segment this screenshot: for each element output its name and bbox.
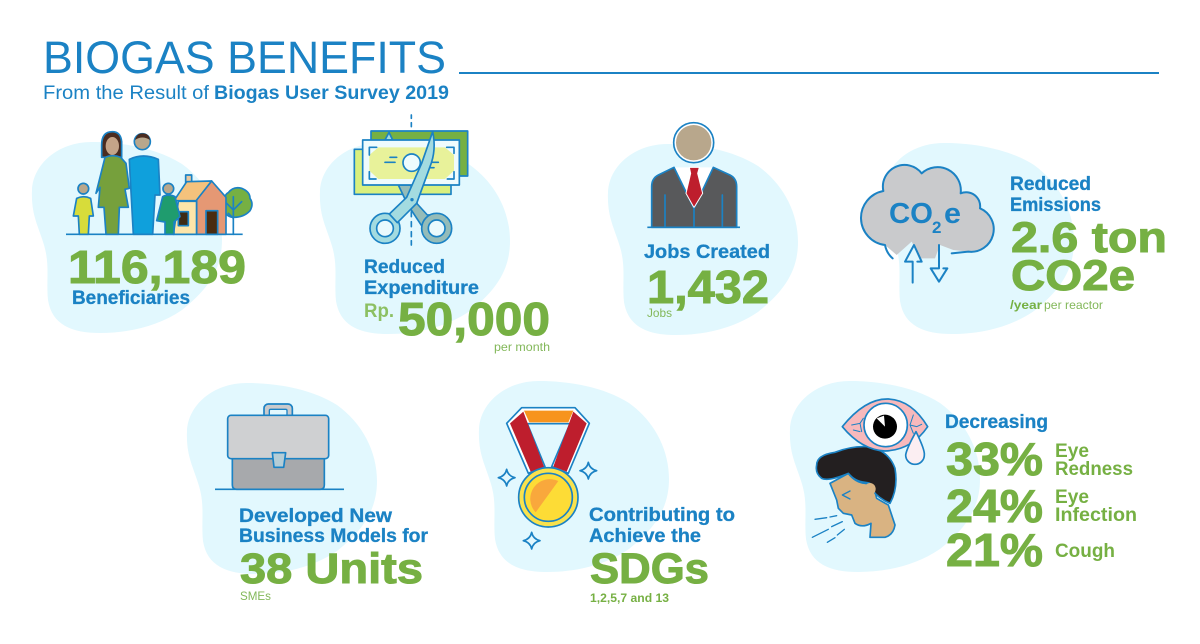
number: SDGs: SDGs bbox=[590, 545, 709, 593]
panel: business models bbox=[187, 383, 429, 603]
heading: developed new business models: Business Models for bbox=[239, 526, 429, 547]
note: per year per reactor: per reactor bbox=[1044, 298, 1103, 312]
stat: 33% eye redness: Redness bbox=[1055, 459, 1133, 480]
stat: 33% eye redness: 33% bbox=[946, 433, 1043, 485]
number: 2.6 ton CO2e: CO2e bbox=[1011, 252, 1135, 300]
panel: reduced emissions bbox=[861, 143, 1167, 334]
icon: CO2e cloud with arrows: CO bbox=[889, 198, 933, 230]
background blob: emissions bbox=[884, 143, 1074, 334]
number: 2.6 ton CO2e: 2.6 ton bbox=[1011, 214, 1167, 262]
note: per year per reactor: /year bbox=[1010, 298, 1042, 312]
title: BIOGAS BENEFITS bbox=[43, 32, 446, 83]
icon: medal bbox=[498, 408, 597, 549]
number: 116,189: 116,189 bbox=[68, 241, 246, 293]
note: per year per reactor bbox=[1010, 298, 1103, 312]
heading: reduced expenditure: Expenditure bbox=[364, 278, 479, 299]
icon: red eye and coughing person bbox=[812, 399, 928, 542]
background blob: SDGs bbox=[479, 381, 669, 572]
background blob: expenditure bbox=[320, 143, 510, 334]
panel: jobs created bbox=[608, 123, 798, 335]
icon: CO2e cloud with arrows: e bbox=[944, 198, 961, 230]
stat: 21% cough: 21% bbox=[946, 524, 1043, 576]
panel: SDGs bbox=[479, 381, 735, 605]
stat: 21% cough bbox=[946, 524, 1115, 576]
note: per month: per month bbox=[494, 340, 550, 354]
heading: reduced emissions: Emissions bbox=[1010, 195, 1101, 216]
heading: reduced expenditure: Reduced bbox=[364, 257, 445, 278]
panel: beneficiaries bbox=[32, 132, 252, 333]
note: jobs: Jobs bbox=[647, 306, 672, 320]
stat: 24% eye infection: Infection bbox=[1055, 505, 1137, 526]
icon: person in suit bbox=[647, 123, 740, 227]
subtitle: From the Result of bbox=[43, 83, 210, 104]
stat: 24% eye infection bbox=[946, 480, 1137, 532]
heading: developed new business models bbox=[239, 506, 429, 547]
label: beneficiaries: Beneficiaries bbox=[72, 288, 190, 309]
heading: developed new business models: Developed New bbox=[239, 506, 392, 527]
stat: 33% eye redness bbox=[946, 433, 1133, 485]
background blob: beneficiaries bbox=[32, 142, 222, 333]
heading: contributing to achieve the: Contributing to bbox=[589, 505, 735, 526]
note: goals list: 1,2,5,7 and 13 bbox=[590, 591, 669, 605]
panel: reduced expenditure bbox=[320, 115, 550, 354]
heading: reduced emissions bbox=[1010, 174, 1101, 216]
number: 38 units: 38 Units bbox=[240, 545, 423, 593]
heading: decreasing: Decreasing bbox=[945, 412, 1048, 433]
number: Rp. 50,000: Rp. bbox=[364, 301, 394, 322]
icon: CO2e cloud with arrows: 2 bbox=[932, 218, 941, 237]
number: Rp. 50,000: 50,000 bbox=[398, 293, 550, 345]
icon: briefcase bbox=[215, 404, 344, 489]
icon: family and house bbox=[66, 132, 252, 234]
icon: scissors cutting banknotes bbox=[354, 115, 468, 245]
background blob: health bbox=[790, 381, 980, 572]
heading: contributing to achieve the bbox=[589, 505, 735, 547]
stat: 21% cough: Cough bbox=[1055, 541, 1115, 562]
background blob: jobs bbox=[608, 144, 798, 335]
heading: jobs created: Jobs Created bbox=[644, 242, 770, 263]
background blob: business bbox=[187, 383, 377, 574]
panel: decreasing health issues bbox=[790, 381, 1137, 576]
heading: reduced expenditure bbox=[364, 257, 479, 299]
icon: CO2e cloud with arrows bbox=[861, 165, 994, 283]
stat: 24% eye infection: 24% bbox=[946, 480, 1043, 532]
number: 1,432: 1,432 bbox=[647, 261, 769, 313]
note: SMEs: SMEs bbox=[240, 589, 271, 603]
number: 2.6 ton CO2e bbox=[1011, 214, 1167, 300]
stat: 33% eye redness: Eye bbox=[1055, 441, 1089, 462]
subtitle bbox=[43, 83, 449, 104]
heading: contributing to achieve the: Achieve the bbox=[589, 526, 701, 547]
subtitle: Biogas User Survey 2019 bbox=[214, 83, 449, 104]
heading: reduced emissions: Reduced bbox=[1010, 174, 1091, 195]
stat: 24% eye infection: Eye bbox=[1055, 487, 1089, 508]
